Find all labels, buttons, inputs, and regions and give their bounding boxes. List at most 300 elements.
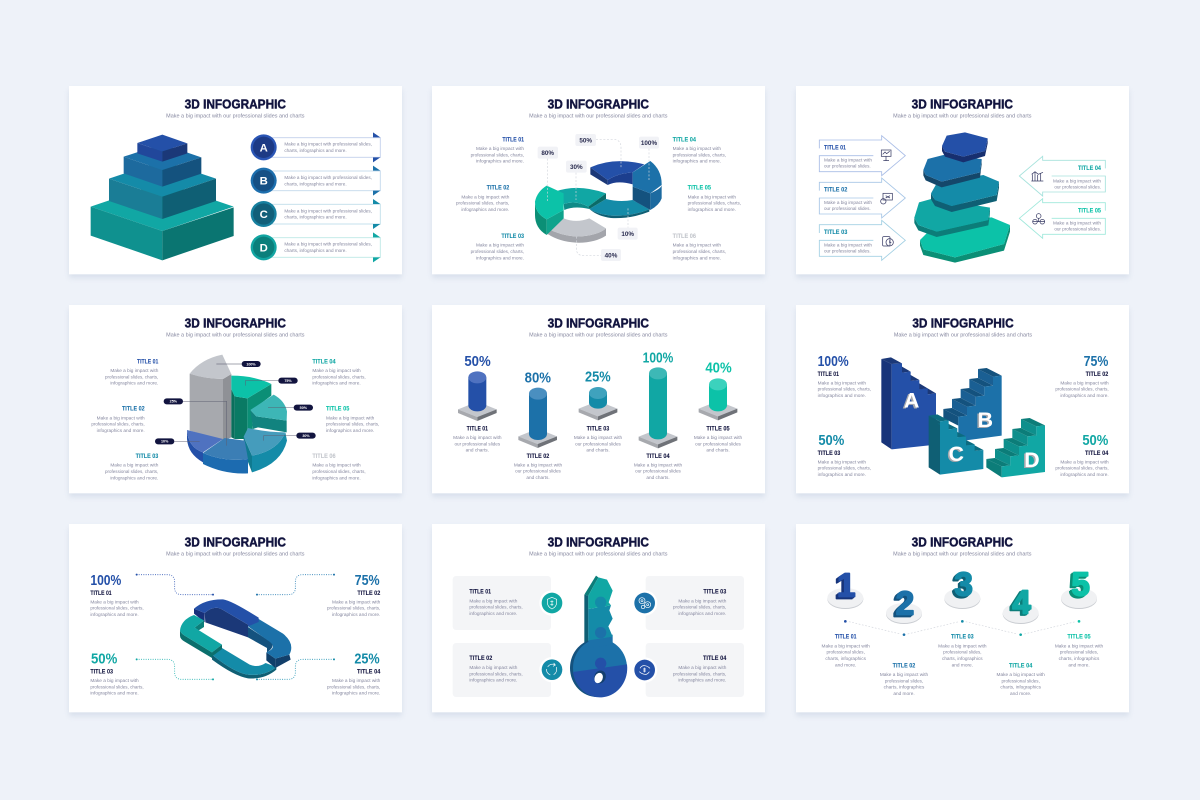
stat: 50% title 03: TITLE 03 xyxy=(818,450,841,457)
arrow: title 05: Make a big impact with xyxy=(1053,221,1101,227)
step 3: 3 xyxy=(953,568,972,605)
bar: 80% xyxy=(518,370,557,448)
stat: 50% title 03 xyxy=(90,652,144,697)
text: title 04: and charts. xyxy=(646,475,670,481)
callout: B: B xyxy=(260,176,268,188)
text: title 05: Make a big impact with xyxy=(688,194,736,200)
text: title 02 xyxy=(880,662,928,697)
text: title 03: TITLE 03 xyxy=(136,453,159,460)
stat: 50% title 04 xyxy=(1055,433,1109,478)
text: title 04: TITLE 04 xyxy=(1009,662,1033,669)
text: title 03: infographics and more. xyxy=(110,475,158,481)
stat: 50% title 04: 50% xyxy=(1082,433,1108,449)
text: title 04 xyxy=(673,136,726,165)
icon: shield xyxy=(539,590,565,616)
icon: presentation board xyxy=(881,150,891,161)
text: title 05: TITLE 05 xyxy=(688,185,711,192)
chart: 3D segmented ring xyxy=(535,161,662,243)
heading: Make a big impact with our professional slides and charts xyxy=(893,552,1032,558)
card: title 04 xyxy=(646,643,744,697)
stat: 75% title 02 xyxy=(1055,354,1109,399)
text: title 02: charts, infographics xyxy=(884,685,925,691)
stat: 25% title 04: infographics and more. xyxy=(332,691,380,697)
stat: 100% title 01: infographics and more. xyxy=(818,393,866,399)
text: title 06: professional slides, charts, xyxy=(312,469,366,475)
stat: 50% title 03: 50% xyxy=(818,433,844,449)
text: title 01 xyxy=(453,426,502,454)
text: title 02: infographics and more. xyxy=(461,207,509,213)
text: title 03 xyxy=(938,633,987,668)
text: title 05: professional slides, charts, xyxy=(688,201,741,207)
callout: B: charts, infographics and more. xyxy=(284,181,347,187)
text: title 05: infographics and more. xyxy=(688,207,736,213)
step 1: 1 xyxy=(837,567,856,604)
card: title 04: TITLE 04 xyxy=(703,655,727,662)
arrow: title 03: Make a big impact with xyxy=(824,242,872,248)
callout: B xyxy=(251,166,380,196)
text: title 04 xyxy=(996,662,1045,697)
text: title 04: TITLE 04 xyxy=(646,453,670,460)
text: title 05 xyxy=(688,185,741,213)
text: title 01: professional slides, xyxy=(826,650,865,656)
arrow: title 01: TITLE 01 xyxy=(824,144,846,151)
text: title 04: Make a big impact with xyxy=(634,462,682,468)
text: title 06 xyxy=(312,453,366,481)
stat: 75% title 02: Make a big impact with xyxy=(1060,380,1109,386)
card: title 02: infographics and more. xyxy=(469,678,517,684)
text: title 01: Make a big impact with xyxy=(821,643,870,649)
text: title 02: and more. xyxy=(893,691,915,697)
arrow: title 01 xyxy=(819,136,905,176)
arrow: title 04 xyxy=(1019,156,1105,196)
step 4: 4 xyxy=(1011,585,1030,622)
text: title 02: our professional slides xyxy=(515,469,561,475)
text: title 05: and more. xyxy=(1068,662,1090,668)
text: title 01: our professional slides xyxy=(454,441,501,447)
stairs: B: B xyxy=(978,408,993,432)
text: title 03: and charts. xyxy=(586,448,610,454)
text: title 03 xyxy=(105,453,159,481)
heading: Make a big impact with our professional slides and charts xyxy=(166,332,305,338)
heading: Make a big impact with our professional slides and charts xyxy=(893,113,1032,119)
step 5: 5 xyxy=(1071,567,1090,604)
heading xyxy=(894,315,1033,339)
text: title 03: professional slides, xyxy=(943,650,981,656)
text: title 04: professional slides, charts, xyxy=(312,374,366,380)
text: title 05: TITLE 05 xyxy=(326,406,350,413)
callout: C xyxy=(251,199,380,229)
callout: B: Make a big impact with professional slides, xyxy=(284,175,372,181)
stat: 25% title 04: professional slides, charts, xyxy=(327,684,380,690)
icon: bar chart xyxy=(1031,172,1043,181)
value badges: 30% xyxy=(570,164,583,171)
heading: 3D INFOGRAPHIC xyxy=(185,534,287,549)
heading: 3D INFOGRAPHIC xyxy=(548,534,650,549)
text: title 01: TITLE 01 xyxy=(467,426,488,433)
value badges: 50% xyxy=(579,137,592,144)
chart: 3D key xyxy=(570,576,627,697)
card: title 03 xyxy=(646,576,744,630)
card: title 01 xyxy=(453,576,551,630)
text: title 02: Make a big impact with xyxy=(880,672,928,678)
heading: 3D INFOGRAPHIC xyxy=(185,315,287,330)
text: title 04: and more. xyxy=(1010,691,1031,697)
bar: 40% xyxy=(699,361,737,420)
text: title 01: and more. xyxy=(835,662,856,668)
panel: 3D ring slide xyxy=(432,86,765,278)
value badges xyxy=(538,134,659,261)
text: title 02: TITLE 02 xyxy=(122,406,145,413)
step 3 xyxy=(944,567,980,623)
arrow: title 01: our professional slides. xyxy=(824,164,871,170)
bar: 25%: 25% xyxy=(585,370,611,386)
bar: 100% xyxy=(639,350,677,448)
arrow: title 05 xyxy=(1019,199,1105,238)
heading xyxy=(166,96,305,119)
text: title 02: TITLE 02 xyxy=(893,662,916,669)
arrow: title 05: TITLE 05 xyxy=(1078,207,1101,214)
text: title 05: charts, infographics xyxy=(1059,656,1100,662)
panel: 3D stairs slide xyxy=(796,305,1129,497)
text: title 01: Make a big impact with xyxy=(453,435,502,441)
icon: network xyxy=(1033,214,1045,224)
callout: D: D xyxy=(260,242,268,254)
card: title 01: infographics and more. xyxy=(469,611,517,617)
text: title 06: TITLE 06 xyxy=(312,453,336,460)
text: title 04 xyxy=(312,358,366,387)
text: title 01: professional slides, charts, xyxy=(105,374,158,380)
text: title 06: infographics and more. xyxy=(673,255,721,261)
stat: 50% title 04: professional slides, charts, xyxy=(1055,466,1109,472)
arrow: title 03 xyxy=(819,220,905,260)
value pills: 50% xyxy=(300,406,308,410)
panel: key slide xyxy=(432,524,765,716)
connectors: dotted leader lines xyxy=(136,574,335,680)
leader lines xyxy=(548,139,649,256)
card: title 03: infographics and more. xyxy=(678,611,726,617)
text: title 01: TITLE 01 xyxy=(137,358,159,365)
text: title 01: charts, infographics xyxy=(825,656,866,662)
text: title 01: professional slides, charts, xyxy=(471,152,524,158)
text: title 02: infographics and more. xyxy=(97,428,145,434)
icon: gears xyxy=(632,590,657,616)
heading xyxy=(893,96,1032,119)
text: title 04: TITLE 04 xyxy=(673,136,696,143)
heading xyxy=(893,534,1032,558)
stairs: D: D xyxy=(1024,448,1040,472)
text: title 06: TITLE 06 xyxy=(673,233,696,240)
icon: currency exchange xyxy=(632,657,657,683)
heading xyxy=(166,315,305,338)
arrow: title 04: Make a big impact with xyxy=(1053,178,1101,184)
text: title 02: Make a big impact with xyxy=(514,462,562,468)
value pills xyxy=(155,361,316,444)
value pills: 10% xyxy=(161,440,169,444)
value pills: 30% xyxy=(302,434,310,438)
stat: 25% title 04: 25% xyxy=(354,652,380,668)
callout: D: charts, infographics and more. xyxy=(284,248,347,254)
text: title 01: infographics and more. xyxy=(110,381,158,387)
stat: 75% title 02: TITLE 02 xyxy=(1086,371,1109,378)
text: title 03 xyxy=(574,426,622,454)
arrow: title 03: TITLE 03 xyxy=(824,229,848,236)
callout: C: C xyxy=(260,209,268,221)
stat: 75% title 02 xyxy=(327,573,381,618)
heading: 3D INFOGRAPHIC xyxy=(185,96,287,111)
stairs: C: C xyxy=(947,443,962,467)
value pills: 100% xyxy=(246,362,256,366)
stairs: A: A xyxy=(902,390,918,414)
text: title 05: infographics and more. xyxy=(326,428,374,434)
text: title 02: professional slides, xyxy=(885,678,923,684)
card: title 04: infographics and more. xyxy=(678,678,726,684)
text: title 03: Make a big impact with xyxy=(110,463,159,469)
arrow: title 02 xyxy=(819,178,905,218)
heading xyxy=(529,96,668,119)
heading: Make a big impact with our professional slides and charts xyxy=(529,552,668,558)
step 5 xyxy=(1061,567,1097,623)
value badges: 80% xyxy=(541,150,554,157)
heading: 3D INFOGRAPHIC xyxy=(912,534,1014,549)
text: title 04: infographics and more. xyxy=(312,381,361,387)
card: title 02 xyxy=(453,643,551,697)
stat: 75% title 02: professional slides, charts, xyxy=(1055,387,1109,393)
bar: 40%: 40% xyxy=(705,361,732,377)
step 5: 5 xyxy=(1069,569,1087,606)
card: title 04: Make a big impact with xyxy=(678,665,727,671)
text: title 03: and more. xyxy=(952,662,973,668)
text: title 06: Make a big impact with xyxy=(312,463,361,469)
text: title 02 xyxy=(91,406,145,434)
text: title 03: Make a big impact with xyxy=(476,243,524,249)
heading: Make a big impact with our professional slides and charts xyxy=(529,332,668,338)
text: title 01 xyxy=(821,633,870,668)
value badges: 100% xyxy=(641,140,657,147)
icon: recycle arrows xyxy=(539,657,565,682)
icon: coins and timer xyxy=(883,237,893,246)
text: title 03: TITLE 03 xyxy=(951,633,974,640)
text: title 05: Make a big impact with xyxy=(1055,643,1103,649)
connector: dashed zigzag xyxy=(849,622,1076,634)
callout: D: Make a big impact with professional slides, xyxy=(284,242,372,248)
text: title 02: TITLE 02 xyxy=(527,453,550,460)
text: title 04: our professional slides xyxy=(635,469,681,475)
text: title 01: and charts. xyxy=(466,448,489,454)
step 4: 4 xyxy=(1010,586,1029,623)
stairs: C xyxy=(929,414,983,475)
text: title 04: Make a big impact with xyxy=(673,146,721,152)
text: title 05 xyxy=(694,426,742,454)
text: title 05: Make a big impact with xyxy=(694,435,742,441)
text: title 03: TITLE 03 xyxy=(501,233,524,240)
stat: 50% title 03 xyxy=(818,433,871,478)
stat: 50% title 03: infographics and more. xyxy=(818,472,866,478)
text: title 02: Make a big impact with xyxy=(461,194,510,200)
arrow: title 03: our professional slides. xyxy=(824,248,871,254)
text: title 04: Make a big impact with xyxy=(996,672,1045,678)
heading xyxy=(529,534,668,558)
text: title 05: our professional slides xyxy=(695,441,741,447)
text: title 04: professional slides, charts, xyxy=(673,152,726,158)
text: title 06 xyxy=(673,233,726,261)
panel: stacked hexagons slide xyxy=(796,86,1129,278)
text: title 02: TITLE 02 xyxy=(487,185,510,192)
card: title 02: TITLE 02 xyxy=(469,655,493,662)
stairs: B: B xyxy=(976,409,991,433)
step 2: 2 xyxy=(896,586,914,623)
stairs: B xyxy=(943,368,1002,441)
stat: 100% title 01 xyxy=(90,573,144,618)
heading: Make a big impact with our professional slides and charts xyxy=(166,113,305,119)
leader lines xyxy=(174,364,296,446)
text: title 01 xyxy=(471,136,524,165)
bar: 50% xyxy=(458,354,497,421)
text: title 01: TITLE 01 xyxy=(502,136,524,143)
step 2 xyxy=(886,586,922,636)
callout: C: charts, infographics and more. xyxy=(284,215,347,221)
callout: C: Make a big impact with professional slides, xyxy=(284,208,372,214)
text: title 05 xyxy=(326,406,379,434)
text: title 02: and charts. xyxy=(526,475,550,481)
text: title 05 xyxy=(1055,633,1103,668)
step 2: 2 xyxy=(893,587,912,624)
bar: 25% xyxy=(579,370,617,420)
stat: 25% title 04 xyxy=(327,652,381,697)
text: title 01: infographics and more. xyxy=(476,159,524,165)
chart: 3D pyramid xyxy=(91,135,234,260)
stat: 100% title 01: Make a big impact with xyxy=(90,599,139,605)
text: title 04: Make a big impact with xyxy=(312,368,361,374)
step 1: 1 xyxy=(836,568,854,605)
stat: 100% title 01: professional slides, charts, xyxy=(818,387,871,393)
text: title 01: Make a big impact with xyxy=(476,146,524,152)
chart: 3D exploded pie xyxy=(187,355,287,473)
text: title 03: Make a big impact with xyxy=(938,643,987,649)
value pills: 25% xyxy=(170,400,178,404)
stat: 50% title 04: Make a big impact with xyxy=(1060,459,1109,465)
callout: A: Make a big impact with professional slides, xyxy=(284,142,372,148)
stat: 100% title 01: 100% xyxy=(90,573,121,589)
text: title 02 xyxy=(456,185,510,213)
arrow: title 04: TITLE 04 xyxy=(1078,165,1101,172)
stat: 50% title 03: 50% xyxy=(91,652,117,668)
panel: cylinder bars slide xyxy=(432,305,765,497)
callout: D xyxy=(251,232,380,262)
text: title 04 xyxy=(634,453,682,481)
step 2: 2 xyxy=(894,587,913,624)
arrow: title 01: Make a big impact with xyxy=(824,158,872,164)
stairs: C: C xyxy=(949,442,964,466)
card: title 01: TITLE 01 xyxy=(469,588,491,595)
text: title 03 xyxy=(471,233,524,261)
callout: A: A xyxy=(260,142,268,154)
step 5: 5 xyxy=(1070,568,1088,605)
value badges: 10% xyxy=(621,231,634,238)
heading: 3D INFOGRAPHIC xyxy=(548,315,650,330)
stat: 50% title 03: Make a big impact with xyxy=(818,459,866,465)
text: title 05: and charts. xyxy=(706,448,730,454)
step 3: 3 xyxy=(954,567,973,604)
card: title 02: Make a big impact with xyxy=(469,665,518,671)
text: title 04: charts, infographics xyxy=(1000,685,1041,691)
text: title 01: Make a big impact with xyxy=(110,368,159,374)
card: title 03: TITLE 03 xyxy=(703,588,727,595)
card: title 01: Make a big impact with xyxy=(469,598,518,604)
heading xyxy=(166,534,305,558)
heading: 3D INFOGRAPHIC xyxy=(912,96,1014,111)
stat: 75% title 02: infographics and more. xyxy=(332,612,380,618)
text: title 03: charts, infographics xyxy=(942,656,983,662)
card: title 02: professional slides, charts, xyxy=(469,671,523,677)
heading: Make a big impact with our professional slides and charts xyxy=(894,333,1033,339)
icon: strategy board xyxy=(881,193,892,204)
stat: 75% title 02: professional slides, charts, xyxy=(327,606,380,612)
heading xyxy=(529,315,668,338)
panel: 3D chain link slide xyxy=(69,524,402,716)
text: title 06: professional slides, charts, xyxy=(673,249,726,255)
stat: 100% title 01: TITLE 01 xyxy=(90,590,112,597)
callout: A xyxy=(251,132,380,162)
value pills: 75% xyxy=(284,379,292,383)
text: title 05: TITLE 05 xyxy=(1067,633,1091,640)
text: title 05: professional slides, xyxy=(1060,650,1098,656)
heading: Make a big impact with our professional slides and charts xyxy=(529,113,668,119)
callout: A: charts, infographics and more. xyxy=(284,148,347,154)
stat: 100% title 01: 100% xyxy=(818,354,849,370)
stat: 100% title 01: TITLE 01 xyxy=(818,371,839,378)
panel: stepped pyramid slide xyxy=(69,86,402,278)
step 1 xyxy=(827,567,863,623)
text: title 05: Make a big impact with xyxy=(326,415,375,421)
heading: 3D INFOGRAPHIC xyxy=(548,96,650,111)
panel: numbered steps slide xyxy=(796,524,1129,716)
arrow: title 05: our professional slides. xyxy=(1054,227,1101,233)
stat: 100% title 01 xyxy=(818,354,871,399)
text: title 05: professional slides, charts, xyxy=(326,422,379,428)
stat: 50% title 03: Make a big impact with xyxy=(90,678,139,684)
value badges: 40% xyxy=(605,252,618,259)
panel: 3D pie slide xyxy=(69,305,402,497)
heading: 3D INFOGRAPHIC xyxy=(912,315,1014,330)
stat: 50% title 04: TITLE 04 xyxy=(1085,450,1109,457)
text: title 06: Make a big impact with xyxy=(673,243,721,249)
bar: 80%: 80% xyxy=(525,370,551,386)
stat: 75% title 02: infographics and more. xyxy=(1060,393,1109,399)
text: title 03: Make a big impact with xyxy=(574,435,622,441)
step 3: 3 xyxy=(952,569,971,606)
arrow: title 02: our professional slides. xyxy=(824,206,871,212)
text: title 04: infographics and more. xyxy=(673,159,721,165)
arrow: title 02: Make a big impact with xyxy=(824,200,872,206)
text: title 01 xyxy=(105,358,159,387)
chart: 3D chain link xyxy=(180,599,291,678)
bar: 50%: 50% xyxy=(464,354,491,370)
stairs: D xyxy=(986,418,1045,477)
step 4: 4 xyxy=(1012,584,1031,621)
text: title 04: TITLE 04 xyxy=(312,358,336,365)
stat: 25% title 04: Make a big impact with xyxy=(332,678,381,684)
text: title 03: infographics and more. xyxy=(476,255,524,261)
arrow: title 04: our professional slides. xyxy=(1054,184,1101,190)
text: title 02: professional slides, charts, xyxy=(456,201,509,207)
stat: 25% title 04: TITLE 04 xyxy=(357,669,381,676)
text: title 03: professional slides, charts, xyxy=(471,249,524,255)
text: title 03: professional slides, charts, xyxy=(105,469,158,475)
stat: 75% title 02: TITLE 02 xyxy=(357,590,381,597)
text: title 02: Make a big impact with xyxy=(97,415,145,421)
stat: 100% title 01: professional slides, charts, xyxy=(90,606,144,612)
stat: 75% title 02: Make a big impact with xyxy=(332,599,381,605)
